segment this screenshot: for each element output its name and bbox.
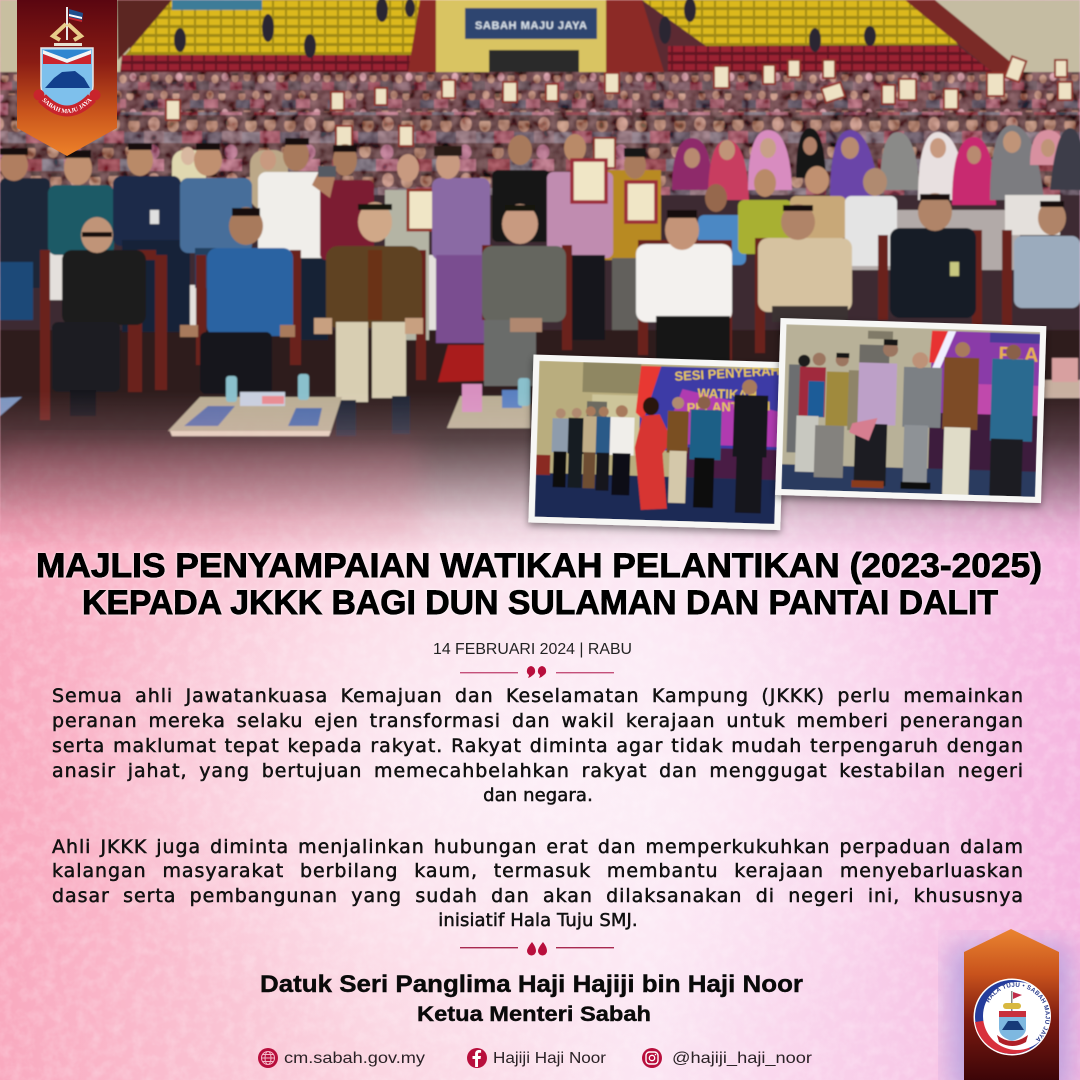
hall background: walls, seating, banner: SABAH MAJU JAYA <box>475 20 587 32</box>
standing row <box>0 134 656 343</box>
man in light blue shirt <box>1014 201 1080 308</box>
man partially visible at left <box>0 262 33 320</box>
purple stage drape <box>685 446 776 490</box>
soft lilac glow behind lower banner <box>950 945 1070 1080</box>
standing: maroon shirt man with phone <box>312 144 374 260</box>
man in brown batik <box>940 342 980 500</box>
stage backdrop wall <box>781 324 1040 497</box>
man in brown batik shirt and khaki trousers <box>314 202 423 436</box>
standing women in hijab and back row people <box>172 125 1080 340</box>
woman in red kebaya <box>634 396 668 511</box>
dark plum drape <box>928 413 1038 476</box>
body text paragraphs: serta maklumat tepat kepada rakyat. Rakyat diminta agar tidak mudah terpengaruh dengan <box>52 735 1024 757</box>
title <box>36 547 1042 622</box>
date: 14 FEBRUARI 2024 | RABU <box>433 641 632 658</box>
body text paragraphs: dan negara. <box>483 785 593 806</box>
instagram handle: @hajiji_haji_noor <box>672 1050 813 1067</box>
title: KEPADA JKKK BAGI DUN SULAMAN DAN PANTAI DALIT <box>82 584 998 622</box>
icon: facebook <box>467 1048 487 1068</box>
body text paragraphs: anasir jahat, yang bertujuan memecahbelahkan rakyat dan menggugat kestabilan negeri <box>52 760 1024 782</box>
screen reading Sesi Penyerahan Watikah Pelantikan: SESI PENYERAHAN <box>674 362 799 384</box>
standing: man in batik shirt with certificate <box>547 134 613 340</box>
bottom-right banner with Hala Tuju seal <box>964 929 1059 1080</box>
navy stage floor <box>534 472 776 524</box>
chairs <box>40 230 1012 420</box>
round seal <box>974 978 1051 1056</box>
chief minister in grey suit <box>900 352 943 490</box>
decorated tables with bottles <box>0 358 1080 436</box>
purple screen: PLA <box>998 344 1039 367</box>
flag on pole <box>66 7 83 40</box>
footer contact links <box>258 1048 813 1068</box>
icon: globe <box>258 1048 278 1068</box>
men in line waiting <box>786 351 865 479</box>
officer in black uniform <box>731 379 769 514</box>
body text paragraphs: dasar serta pembangunan yang sudah dan akan dilaksanakan di negeri ini, khususnya <box>52 885 1024 907</box>
signatory name and role: Ketua Menteri Sabah <box>417 1003 651 1026</box>
reddish fade of photo into pink on the left <box>0 440 420 540</box>
top-left banner with Sabah coat of arms <box>17 0 117 156</box>
white seat covers <box>48 195 1060 345</box>
body text paragraphs: Semua ahli Jawatankuasa Kemajuan dan Keselamatan Kampung (JKKK) perlu memainkan <box>52 685 1024 707</box>
man in khaki shirt <box>758 204 852 322</box>
standing: woman in purple <box>432 146 490 343</box>
quote divider bottom <box>460 942 614 956</box>
screen reading Sesi Penyerahan Watikah Pelantikan: PELANTIKAN <box>687 398 771 415</box>
standing: teal shirt man <box>48 150 114 255</box>
hall background: walls, seating, banner <box>0 0 1080 74</box>
standing: man in songkok with certificate <box>624 148 656 222</box>
standing: uniformed officer <box>113 143 190 332</box>
website: cm.sabah.gov.my <box>284 1050 425 1067</box>
inset photo: certificate presentation on stage <box>528 354 799 531</box>
title: MAJLIS PENYAMPAIAN WATIKAH PELANTIKAN (2023-2025) <box>36 547 1042 585</box>
shield <box>41 48 93 108</box>
man in grey shirt <box>482 204 566 386</box>
red carpet <box>437 344 485 384</box>
main event photo: hall with crowd and front row dignitaries <box>0 0 1080 560</box>
man in pink batik with folder <box>847 338 898 489</box>
audience holding certificates <box>0 56 1080 345</box>
red ribbon with motto: SABAH MAJU JAYA <box>42 98 92 114</box>
police officer in dark uniform <box>890 193 976 318</box>
purple screen <box>928 331 1040 418</box>
screen reading Sesi Penyerahan Watikah Pelantikan <box>635 365 779 452</box>
navy stage floor <box>781 464 1036 502</box>
round seal: HALA TUJU • SABAH MAJU JAYA <box>986 982 1050 1042</box>
body text paragraphs: kalangan masyarakat berbilang kaum, termasuk membantu kerajaan menyebarluaskan <box>52 860 1024 882</box>
facebook name: Hajiji Haji Noor <box>493 1050 607 1067</box>
seated front row <box>0 193 1080 436</box>
inset photo: handshake on stage <box>775 318 1046 503</box>
floor <box>0 330 1080 560</box>
man in blue shirt <box>688 396 722 508</box>
signatory name and role: Datuk Seri Panglima Haji Hajiji bin Haji Noor <box>260 971 803 998</box>
standing: woman in grey with certificate <box>385 154 436 340</box>
standing: man in black shirt <box>492 135 550 242</box>
row of men on stage <box>550 403 635 496</box>
screen reading Sesi Penyerahan Watikah Pelantikan: WATIKAH <box>697 386 757 402</box>
signatory name and role <box>260 971 803 1026</box>
body text paragraphs: Ahli JKKK juga diminta menjalinkan hubungan erat dan memperkukuhkan perpaduan dalam <box>52 836 1024 858</box>
man in black jacket with glasses <box>52 217 146 416</box>
man in batik <box>665 397 689 503</box>
stage backdrop wall <box>536 360 779 478</box>
crossed arms crest <box>53 24 81 40</box>
body text paragraphs: inisiatif Hala Tuju SMJ. <box>438 910 638 931</box>
man in blue shirt <box>180 207 295 394</box>
standing: navy shirt man far left <box>0 148 50 288</box>
body text paragraphs: peranan mereka selaku ejen transformasi dan wakil kerajaan untuk memberi penerangan <box>52 710 1024 732</box>
man in blue shirt <box>988 344 1035 502</box>
icon: instagram <box>642 1048 662 1068</box>
man in white shirt <box>636 210 732 366</box>
red ribbon with motto <box>34 90 100 116</box>
second row seated people right <box>698 166 897 266</box>
quote divider top <box>460 666 614 678</box>
standing: white shirt man <box>258 138 328 340</box>
standing: blue shirt man <box>180 143 252 288</box>
